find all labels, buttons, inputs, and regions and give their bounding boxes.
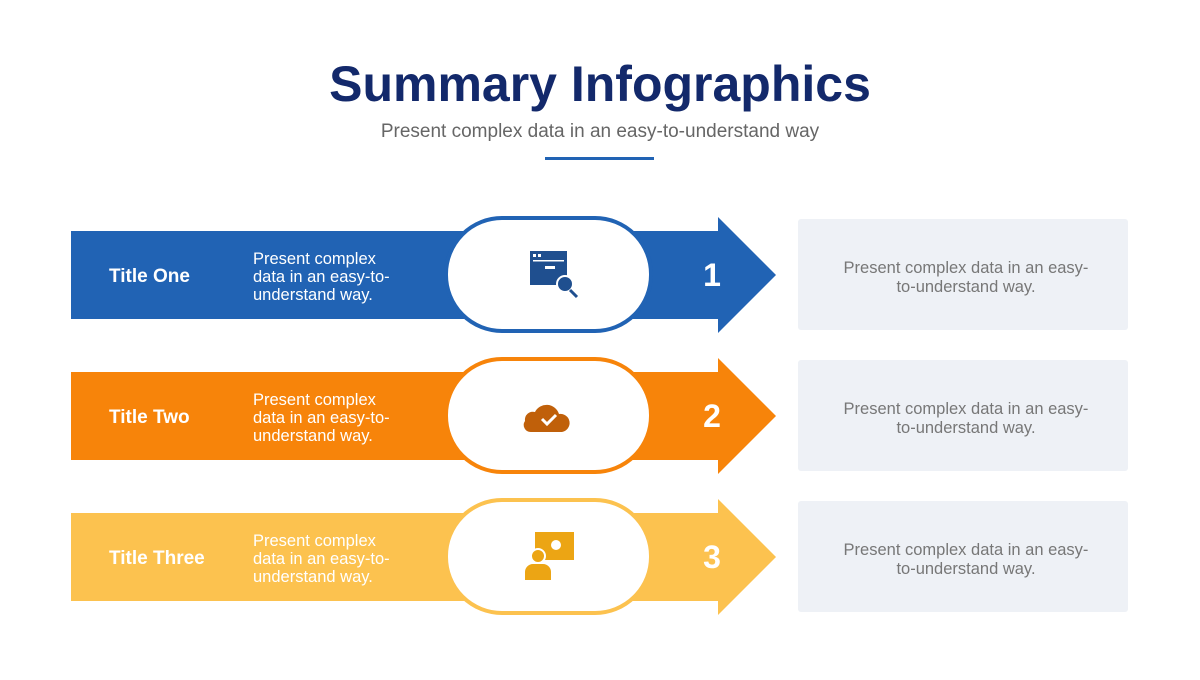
row text 3: Present complex xyxy=(253,532,377,550)
number 3: 3 xyxy=(703,539,721,575)
row 2: to-understand way. xyxy=(896,419,1036,437)
row text 1: Present complex xyxy=(253,250,377,268)
box 1 xyxy=(798,219,1128,330)
number 1: 1 xyxy=(703,257,721,293)
pill 1 xyxy=(446,218,651,331)
row text 1: understand way. xyxy=(253,286,373,304)
arrow 2 xyxy=(71,358,776,474)
box 2 xyxy=(798,360,1128,471)
arrow 1 xyxy=(71,217,776,333)
row 2 xyxy=(71,358,1128,474)
row text 3: data in an easy-to- xyxy=(253,550,390,568)
row title 2: Title Two xyxy=(109,407,190,428)
pill 2 xyxy=(446,359,651,472)
icon: checklist search xyxy=(530,251,577,297)
number 2: 2 xyxy=(703,398,721,434)
row 1: to-understand way. xyxy=(896,278,1036,296)
row text 2: data in an easy-to- xyxy=(253,409,390,427)
icon: presenter xyxy=(525,532,574,580)
row 3: to-understand way. xyxy=(896,560,1036,578)
row 1: Present complex data in an easy- xyxy=(844,259,1088,277)
title: Summary Infographics xyxy=(329,56,871,112)
subtitle: Present complex data in an easy-to-understand way xyxy=(381,121,820,142)
row 3: Present complex data in an easy- xyxy=(844,541,1088,559)
row text 3: understand way. xyxy=(253,568,373,586)
icon: cloud check xyxy=(524,405,570,432)
underline xyxy=(545,157,654,160)
row 1 xyxy=(71,217,1128,333)
box 3 xyxy=(798,501,1128,612)
row title 1: Title One xyxy=(109,266,190,287)
row text 1: data in an easy-to- xyxy=(253,268,390,286)
row title 3: Title Three xyxy=(109,548,205,569)
pill 3 xyxy=(446,500,651,613)
row text 2: Present complex xyxy=(253,391,377,409)
row 3 xyxy=(71,499,1128,615)
arrow 3 xyxy=(71,499,776,615)
row text 2: understand way. xyxy=(253,427,373,445)
row 2: Present complex data in an easy- xyxy=(844,400,1088,418)
